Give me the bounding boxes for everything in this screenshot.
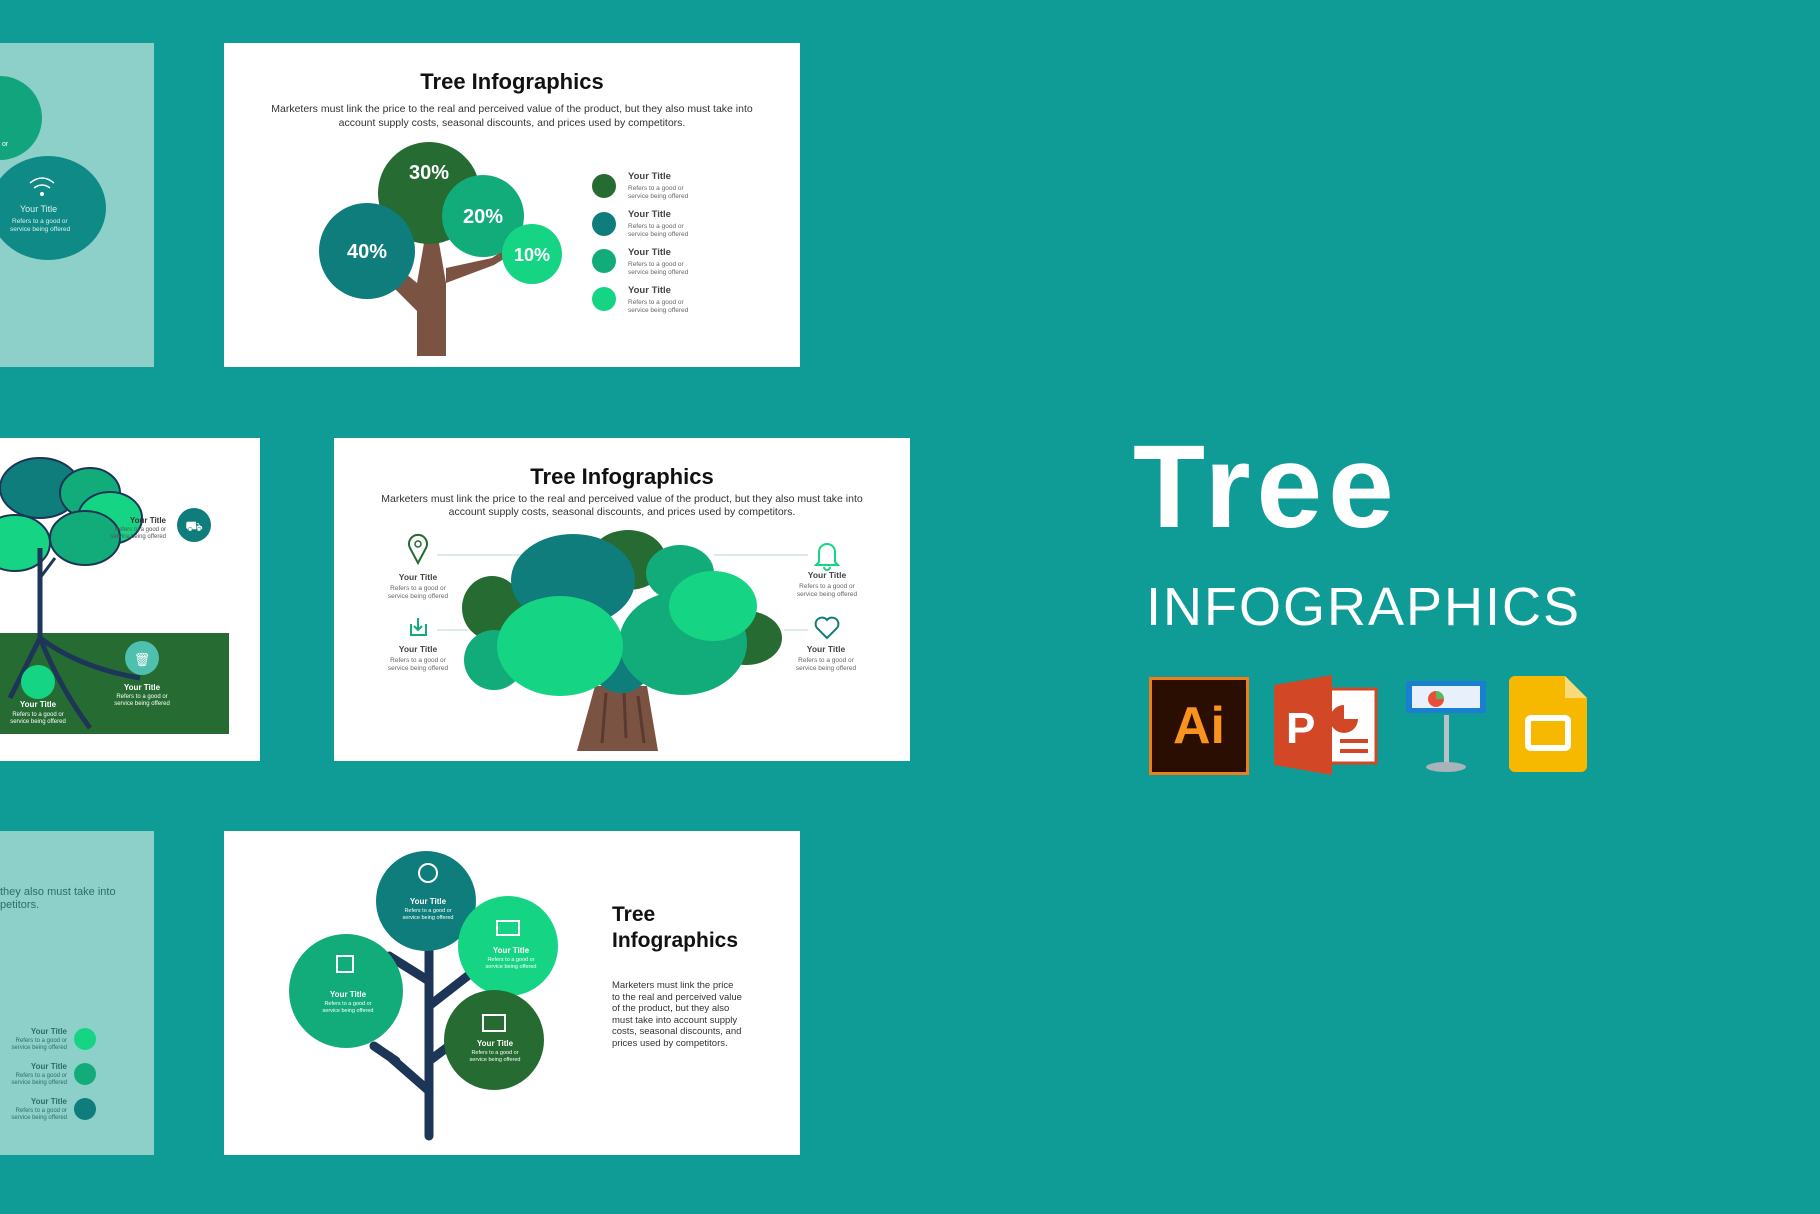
circle: lower right: service being offered: [470, 1057, 520, 1063]
item: trash: [114, 641, 170, 707]
trunk: [577, 686, 658, 751]
circle: top: Refers to a good or: [404, 908, 452, 914]
circle: top: service being offered: [403, 915, 453, 921]
trunk and roots: [10, 548, 140, 728]
legend: service being offered: [628, 193, 689, 200]
item: bell: service being offered: [797, 591, 857, 598]
legend list: Refers to a good or: [16, 1108, 67, 1114]
connector lines: [437, 555, 808, 630]
item: bell: Your Title: [808, 570, 846, 580]
subtitle: account supply costs, seasonal discounts, and prices used by competitors.: [449, 506, 795, 518]
legend: service being offered: [628, 269, 689, 276]
panel: top slide percentage tree: [224, 43, 800, 367]
paragraph: of the product, but they also: [612, 1003, 729, 1014]
blob top: or: [2, 141, 9, 148]
blob with wifi icon: Refers to a good or: [12, 218, 68, 225]
item: trash: service being offered: [114, 701, 170, 707]
item: download: Refers to a good or: [390, 657, 447, 664]
heading: Tree: [612, 903, 655, 926]
item: heart: Refers to a good or: [798, 657, 855, 664]
blob with wifi icon: Your Title: [20, 204, 57, 214]
panel: left partial slide middle: [0, 438, 260, 761]
panel: bottom slide circle tree: [224, 831, 800, 1155]
paragraph: [612, 980, 742, 1049]
subtitle: account supply costs, seasonal discounts, and prices used by competitors.: [339, 117, 685, 129]
legend: Refers to a good or: [628, 185, 684, 192]
item: heart: [796, 618, 856, 672]
trunk: [389, 243, 520, 356]
circle: lower right: Refers to a good or: [471, 1050, 519, 1056]
blob with wifi icon: service being offered: [10, 226, 71, 233]
chart: percentage circles: 10%: [514, 245, 550, 265]
legend: service being offered: [628, 231, 689, 238]
item: bell: [797, 544, 857, 598]
circle: right: Refers to a good or: [487, 957, 535, 963]
legend list: service being offered: [11, 1045, 67, 1051]
item: cart: Refers to a good or: [115, 527, 166, 533]
circle: right: Your Title: [493, 946, 530, 955]
legend: service being offered: [628, 307, 689, 314]
chart: percentage circles: [319, 142, 562, 299]
paragraph: must take into account supply: [612, 1015, 737, 1026]
item: heart: service being offered: [796, 665, 856, 672]
icon: Adobe Illustrator: [1149, 677, 1249, 775]
paragraph: to the real and perceived value: [612, 992, 742, 1003]
heading: Tree Infographics: [420, 69, 604, 94]
circle: left: [289, 934, 403, 1048]
icon: PowerPoint: [1274, 675, 1378, 775]
paragraph: costs, seasonal discounts, and: [612, 1026, 741, 1037]
heading: Tree Infographics: [530, 464, 714, 489]
legend list: Your Title: [31, 1027, 68, 1036]
item: basket: [10, 665, 66, 725]
legend list: service being offered: [11, 1115, 67, 1121]
subtitle: Marketers must link the price to the real and perceived value of the product, but they also must take into: [271, 103, 753, 115]
panel: left partial slide bottom: [0, 831, 154, 1155]
navy trunk and branches: [374, 926, 474, 1136]
blob with wifi icon: [0, 156, 106, 260]
item: heart: Your Title: [807, 644, 845, 654]
item: pin: Your Title: [399, 572, 437, 582]
subtitle: [271, 103, 753, 129]
blob top: [0, 76, 42, 160]
chart: percentage circles: 30%: [409, 162, 449, 184]
legend: Refers to a good or: [628, 261, 684, 268]
ground: [0, 633, 229, 734]
icon: Adobe Illustrator: Ai: [1173, 697, 1225, 755]
item: trash: Your Title: [124, 683, 161, 692]
legend: Refers to a good or: [628, 299, 684, 306]
legend: Your Title: [628, 247, 671, 258]
legend: Your Title: [628, 285, 671, 296]
legend list: [11, 1027, 96, 1121]
canopy: [462, 530, 782, 696]
legend list: service being offered: [11, 1080, 67, 1086]
item: basket: Your Title: [20, 700, 57, 709]
heading: [612, 903, 738, 952]
legend: Your Title: [628, 209, 671, 220]
paragraph: prices used by competitors.: [612, 1038, 728, 1049]
subtitle: INFOGRAPHICS: INFOGRAPHICS: [1146, 577, 1581, 637]
canopy: [0, 458, 142, 571]
panel: middle slide big tree: [334, 438, 910, 761]
item: cart: ⛟: [185, 518, 203, 534]
panel: left partial slide top: [0, 43, 154, 367]
item: pin: service being offered: [388, 593, 448, 600]
icon: Keynote: [1406, 681, 1486, 772]
circle: lower right: [444, 990, 544, 1090]
paragraph: Marketers must link the price: [612, 980, 733, 991]
legend list: Your Title: [31, 1097, 68, 1106]
circle: lower right: Your Title: [477, 1039, 514, 1048]
partial text: petitors.: [0, 899, 39, 911]
circle: left: Your Title: [330, 990, 367, 999]
item: download: service being offered: [388, 665, 448, 672]
circle: top: Your Title: [410, 897, 447, 906]
circle: right: service being offered: [486, 964, 536, 970]
item: trash: 🗑: [134, 652, 150, 667]
legend: [592, 171, 689, 314]
legend list: Your Title: [31, 1062, 68, 1071]
title: Tree: Tree: [1133, 421, 1400, 553]
legend list: Refers to a good or: [16, 1038, 67, 1044]
item: download: [388, 618, 448, 672]
item: pin: [388, 535, 448, 600]
partial text: [0, 886, 116, 911]
item: trash: Refers to a good or: [116, 694, 168, 700]
heading: Infographics: [612, 929, 738, 952]
item: cart: [110, 508, 211, 542]
circle: left: Refers to a good or: [324, 1001, 372, 1007]
legend: Your Title: [628, 171, 671, 182]
item: basket: service being offered: [10, 719, 66, 725]
item: cart: Your Title: [130, 516, 167, 525]
subtitle: [381, 493, 863, 518]
circle: right: [458, 896, 558, 996]
chart: percentage circles: 20%: [463, 206, 503, 228]
item: basket: Refers to a good or: [12, 712, 64, 718]
item: cart: service being offered: [110, 534, 166, 540]
circle: left: service being offered: [323, 1008, 373, 1014]
partial text: they also must take into: [0, 886, 116, 898]
circle: top: [376, 851, 476, 951]
legend: Refers to a good or: [628, 223, 684, 230]
item: pin: Refers to a good or: [390, 585, 447, 592]
chart: percentage circles: 40%: [347, 241, 387, 263]
legend list: Refers to a good or: [16, 1073, 67, 1079]
icon: Google Slides: [1509, 676, 1587, 772]
item: bell: Refers to a good or: [799, 583, 856, 590]
icon: PowerPoint: P: [1286, 704, 1315, 753]
item: download: Your Title: [399, 644, 437, 654]
subtitle: Marketers must link the price to the real and perceived value of the product, but they also must take into: [381, 493, 863, 505]
